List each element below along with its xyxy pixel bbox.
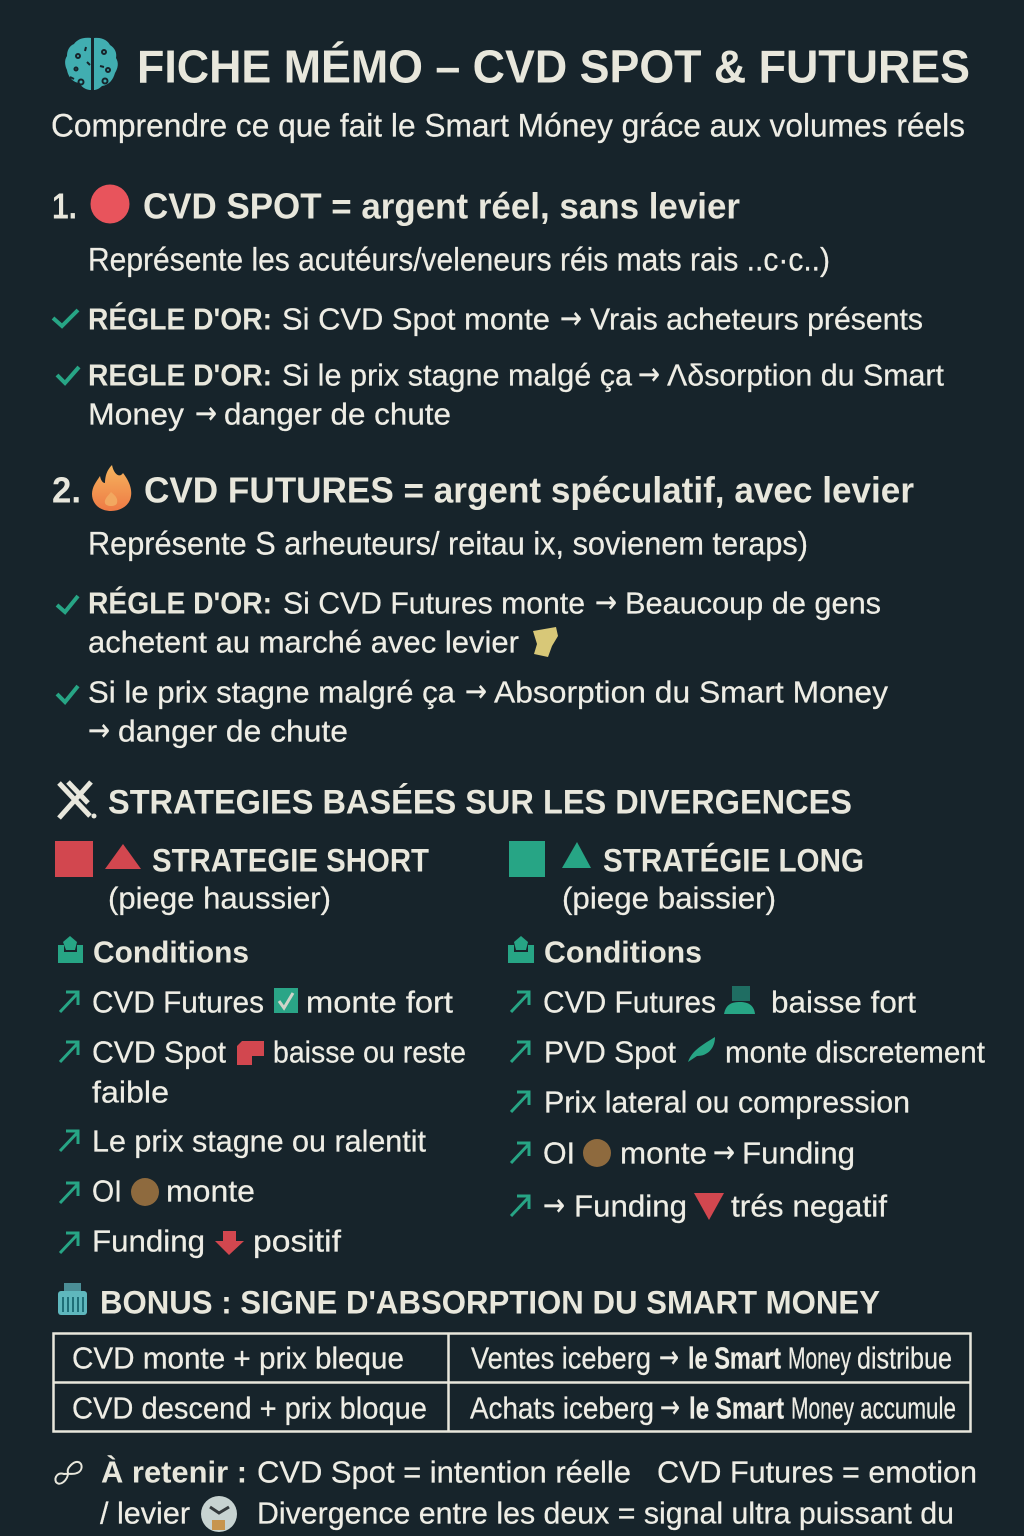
takeaway [55, 1454, 977, 1532]
heading: CVD Futures: CVD FUTURES = argent spéculatif, avec levier [144, 469, 914, 510]
condition: funding: Funding [574, 1188, 687, 1223]
row 2: CVD descend + prix bloque [72, 1390, 427, 1425]
description: Représente les acutéurs/veleneurs réis mats rais ..c·c..) [88, 241, 830, 277]
takeaway text: / levier [100, 1495, 190, 1530]
rule 2: Money [88, 396, 185, 431]
condition: CVD Futures: CVD Futures [543, 984, 716, 1019]
rule 2: → [465, 673, 487, 709]
rule 1: achetent au marché avec levier [88, 624, 519, 659]
header [51, 38, 970, 143]
long heading [509, 841, 864, 915]
section 2: CVD Futures [52, 465, 914, 748]
section heading: strategies: STRATEGIES BASÉES SUR LES DIVERGENCES [108, 783, 852, 821]
row 2: Money [791, 1390, 854, 1425]
condition: CVD Spot: CVD Spot [92, 1034, 226, 1069]
condition: OI: OI [92, 1173, 122, 1208]
condition: CVD Spot: faible [92, 1074, 169, 1109]
rule 1: Si CVD Futures monte [283, 585, 585, 620]
row 1 [72, 1339, 952, 1375]
takeaway text [100, 1454, 977, 1532]
row 1: distribue [857, 1340, 952, 1375]
icon: crossed swords [59, 782, 96, 818]
rule 2: Absorption du Smart Money [494, 674, 889, 709]
condition: OI [511, 1134, 855, 1170]
rule 1: RÉGLE D'OR: [88, 585, 272, 620]
condition: CVD Futures: monte fort [306, 984, 453, 1019]
condition: CVD Futures [60, 984, 453, 1019]
conditions heading: Conditions [544, 934, 702, 969]
conditions heading: Conditions [93, 934, 249, 969]
icon: infinity link [55, 1462, 82, 1484]
takeaway text: À retenir : [101, 1454, 247, 1489]
title: FICHE MÉMO – CVD SPOT & FUTURES [137, 40, 970, 92]
row 1: Money [788, 1340, 851, 1375]
description: Représente S arheuteurs/ reitau ix, sovienem teraps) [88, 525, 808, 561]
rule 1: RÉGLE D'OR: [88, 301, 272, 336]
condition: CVD Spot: baisse ou reste [273, 1034, 466, 1069]
rule 2: Si le prix stagne malgé ça [282, 357, 633, 392]
rule 2: → [638, 356, 660, 392]
table: absorption signals [53, 1333, 971, 1432]
condition: PVD Spot: PVD Spot [544, 1034, 676, 1069]
rule 2: REGLE D'OR: [88, 357, 272, 392]
takeaway text: CVD Futures = emotion [657, 1454, 977, 1489]
condition: PVD Spot [511, 1034, 985, 1069]
condition: price: Prix lateral ou compression [544, 1084, 910, 1119]
row 1: le Smart [688, 1340, 781, 1375]
rule 1: Beaucoup de gens [625, 585, 881, 620]
short heading [55, 841, 429, 915]
row 2: le Smart [689, 1390, 784, 1425]
condition: CVD Futures: CVD Futures [92, 984, 264, 1019]
bonus heading: BONUS : SIGNE D'ABSORPTION DU SMART MONEY [100, 1284, 880, 1320]
rule 2: Λδsorption du Smart [667, 357, 944, 392]
condition: funding: → [543, 1187, 565, 1223]
rule 2: → [88, 712, 110, 748]
takeaway text: Divergence entre les deux = signal ultra puissant du [257, 1495, 954, 1530]
heading: CVD Futures: 2. [52, 469, 81, 510]
condition: OI [60, 1173, 255, 1208]
rule 2 [57, 673, 889, 748]
row 2 [72, 1389, 956, 1425]
long heading: (piege baissier) [562, 880, 776, 915]
condition: funding [60, 1223, 341, 1258]
row 1: Ventes iceberg [471, 1340, 651, 1375]
condition: funding: Funding [92, 1223, 205, 1258]
section 1: CVD Spot [52, 184, 944, 431]
condition: CVD Futures: baisse fort [771, 984, 916, 1019]
condition: OI: monte [620, 1135, 707, 1170]
subtitle: Comprendre ce que fait le Smart Móney gráce aux volumes réels [51, 107, 965, 143]
rule 2: danger de chute [224, 396, 451, 431]
condition: funding [511, 1187, 887, 1223]
condition: OI: → [713, 1134, 735, 1170]
rule 1: Vrais acheteurs présents [590, 301, 923, 336]
row 2: → [660, 1389, 680, 1425]
rule 2 [57, 356, 944, 431]
row 2: accumule [860, 1390, 956, 1425]
rule 2: Si le prix stagne malgré ça [88, 674, 456, 709]
condition: CVD Futures [511, 984, 916, 1019]
short heading: (piege haussier) [108, 880, 331, 915]
rule 2: danger de chute [118, 713, 348, 748]
condition: funding: trés negatif [731, 1188, 887, 1223]
rule 1: → [560, 300, 582, 336]
rule 2: → [195, 395, 217, 431]
icon: brain [65, 38, 118, 90]
condition: CVD Spot [60, 1034, 466, 1109]
heading: CVD Spot: CVD SPOT = argent réel, sans levier [143, 185, 740, 226]
rule 1 [57, 584, 881, 659]
short heading: STRATEGIE SHORT [152, 842, 429, 878]
condition: OI: monte [166, 1173, 255, 1208]
condition: OI: OI [543, 1135, 575, 1170]
condition: funding: positif [253, 1223, 341, 1258]
panel: short strategy [55, 841, 466, 1258]
long heading: STRATÉGIE LONG [603, 842, 864, 878]
condition: price: Le prix stagne ou ralentit [92, 1123, 426, 1158]
heading: CVD Spot: 1. [52, 185, 77, 226]
condition: OI: Funding [742, 1135, 855, 1170]
takeaway text: CVD Spot = intention réelle [257, 1454, 631, 1489]
rule 1 [53, 300, 923, 336]
row 1: CVD monte + prix bleque [72, 1340, 404, 1375]
panel: long strategy [508, 841, 985, 1223]
rule 1: Si CVD Spot monte [282, 301, 550, 336]
rule 1: → [595, 584, 617, 620]
icon: jar [58, 1283, 87, 1315]
condition: PVD Spot: monte discretement [725, 1034, 985, 1069]
row 1: → [659, 1339, 679, 1375]
row 2: Achats iceberg [470, 1390, 654, 1425]
